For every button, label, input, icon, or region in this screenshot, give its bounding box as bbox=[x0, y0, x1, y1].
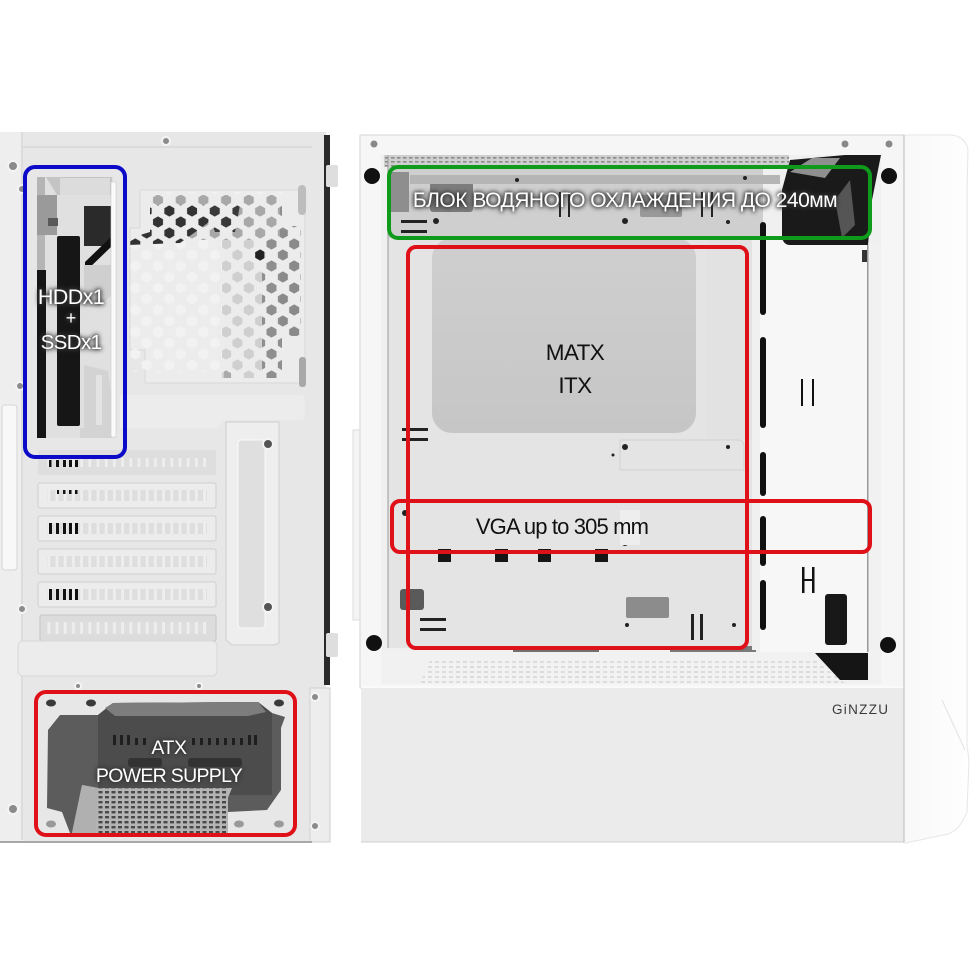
callout: motherboard: ITX bbox=[558, 373, 592, 398]
callout: motherboard bbox=[408, 247, 747, 648]
floor cutouts bbox=[513, 646, 599, 655]
CPU cutout bbox=[432, 238, 696, 433]
fan mesh bbox=[130, 195, 301, 378]
callout: water cooling bbox=[389, 167, 870, 238]
callout: drive bays bbox=[25, 167, 125, 457]
callout: graphics card: VGA up to 305 mm bbox=[476, 514, 648, 539]
radiator and fan corner bbox=[782, 155, 881, 245]
callout: power supply bbox=[36, 692, 295, 835]
callout: graphics card bbox=[392, 501, 870, 552]
PSU opening bbox=[46, 700, 285, 833]
black right edge bbox=[324, 135, 330, 685]
bottom plate bbox=[18, 641, 217, 676]
drive opening bbox=[37, 177, 113, 438]
callout: drive bays: + bbox=[66, 308, 76, 328]
panel: side view of case bbox=[353, 135, 969, 843]
callout: drive bays: SSDx1 bbox=[41, 331, 102, 354]
cable tie slots bbox=[438, 549, 608, 562]
slot bracket bbox=[226, 422, 279, 645]
callout: motherboard: MATX bbox=[546, 340, 605, 365]
expansion slot covers bbox=[38, 450, 216, 641]
callout: drive bays: HDDx1 bbox=[38, 285, 104, 309]
floor mesh bbox=[381, 652, 881, 684]
cable compartment bbox=[760, 238, 868, 656]
fan mount plate bbox=[130, 190, 305, 383]
top mesh strip bbox=[384, 155, 789, 167]
panel: rear view of case bbox=[0, 132, 338, 842]
screws bbox=[8, 137, 319, 830]
logo: GINZZU: GiNZZU bbox=[832, 702, 889, 717]
panel separator ledge bbox=[120, 395, 305, 428]
motherboard tray bbox=[388, 167, 760, 648]
callout: power supply: ATX bbox=[151, 737, 187, 759]
callout: power supply: POWER SUPPLY bbox=[96, 765, 243, 787]
callout: water cooling: БЛОК ВОДЯНОГО ОХЛАЖДЕНИЯ ДО 240мм bbox=[413, 189, 837, 212]
frame corner screws bbox=[364, 168, 897, 653]
front panel bbox=[904, 135, 969, 843]
bottom cover bbox=[361, 687, 904, 842]
